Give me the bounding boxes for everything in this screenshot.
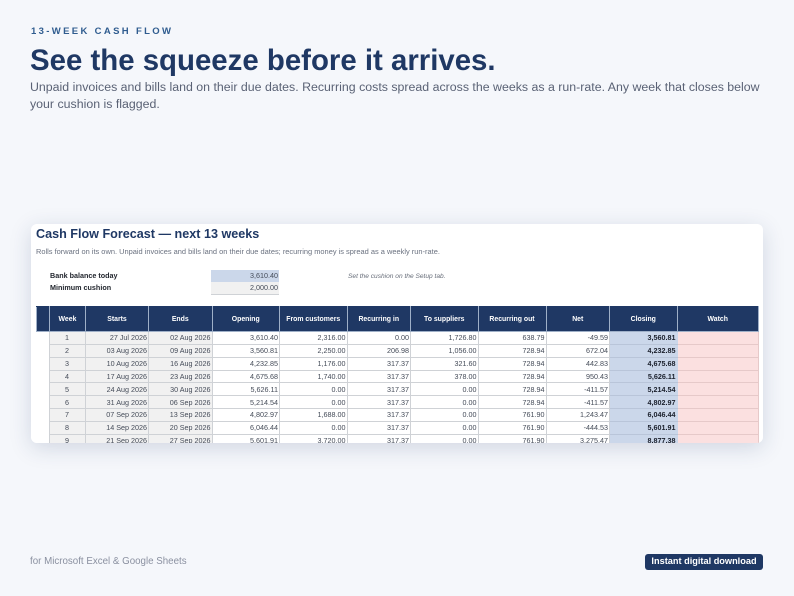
panel: forecast spreadsheet bbox=[31, 224, 763, 443]
forecast table: Recurring out bbox=[489, 316, 535, 322]
forecast table: -411.57 bbox=[584, 398, 608, 407]
forecast table: -444.53 bbox=[584, 423, 608, 432]
forecast table: 5,626.11 bbox=[648, 372, 676, 381]
title: See the squeeze before it arrives. bbox=[30, 44, 496, 77]
forecast table: 0.00 bbox=[462, 423, 476, 432]
forecast table: 321.60 bbox=[455, 359, 476, 368]
forecast table: 2 bbox=[65, 346, 69, 355]
forecast table: 07 Sep 2026 bbox=[106, 410, 147, 419]
forecast table: 317.37 bbox=[387, 410, 409, 419]
label: bank balance: Bank balance today bbox=[50, 271, 118, 280]
forecast table: Ends bbox=[172, 316, 189, 322]
forecast table: Week bbox=[59, 316, 76, 322]
forecast table: -49.59 bbox=[588, 333, 608, 342]
forecast table: 10 Aug 2026 bbox=[107, 359, 147, 368]
card shadow bbox=[31, 224, 763, 443]
sheet title: Cash Flow Forecast — next 13 weeks bbox=[36, 227, 259, 241]
forecast table: 1,056.00 bbox=[449, 346, 476, 355]
forecast table: 5 bbox=[65, 385, 69, 394]
forecast table: From customers bbox=[286, 316, 340, 322]
forecast table: 8 bbox=[65, 423, 69, 432]
forecast table: 7 bbox=[65, 410, 69, 419]
eyebrow label: 13-WEEK CASH FLOW bbox=[31, 26, 173, 37]
forecast table: 1,726.80 bbox=[449, 333, 476, 342]
forecast table: 0.00 bbox=[332, 385, 346, 394]
forecast table: 0.00 bbox=[395, 333, 409, 342]
forecast table: 16 Aug 2026 bbox=[170, 359, 210, 368]
forecast table: 3,560.81 bbox=[250, 346, 278, 355]
forecast table: Watch bbox=[708, 316, 728, 322]
forecast table: 4,675.68 bbox=[250, 372, 278, 381]
forecast table: 317.37 bbox=[387, 423, 409, 432]
forecast table: 4,232.85 bbox=[648, 346, 676, 355]
forecast table: 317.37 bbox=[387, 385, 409, 394]
forecast table: 14 Sep 2026 bbox=[106, 423, 147, 432]
forecast table: Recurring in bbox=[358, 316, 399, 322]
forecast table: 728.94 bbox=[523, 359, 544, 368]
description text: Unpaid invoices and bills land on their due dates. Recurring costs spread across the weeks as a run-rate. Any week that closes below your cushion is flagged. bbox=[30, 80, 760, 111]
forecast table: 0.00 bbox=[332, 423, 346, 432]
forecast table: 0.00 bbox=[462, 410, 476, 419]
forecast table: 4 bbox=[65, 372, 69, 381]
forecast table: 4,675.68 bbox=[648, 359, 676, 368]
forecast table: 3,560.81 bbox=[648, 333, 676, 342]
forecast table: 23 Aug 2026 bbox=[170, 372, 210, 381]
forecast table: 06 Sep 2026 bbox=[170, 398, 210, 407]
forecast table: 206.98 bbox=[387, 346, 409, 355]
setup note: Set the cushion on the Setup tab. bbox=[348, 273, 446, 280]
forecast table: 6,046.44 bbox=[648, 410, 676, 419]
footer note: for Microsoft Excel & Google Sheets bbox=[30, 556, 187, 567]
forecast table: 20 Sep 2026 bbox=[170, 423, 210, 432]
forecast table: 5,214.54 bbox=[250, 398, 278, 407]
forecast table: 30 Aug 2026 bbox=[170, 385, 210, 394]
forecast table: 02 Aug 2026 bbox=[170, 333, 210, 342]
forecast table: 672.04 bbox=[586, 346, 608, 355]
forecast table: 728.94 bbox=[523, 346, 544, 355]
forecast table: 950.43 bbox=[586, 372, 608, 381]
forecast table: 17 Aug 2026 bbox=[107, 372, 147, 381]
forecast table: 5,626.11 bbox=[251, 385, 278, 394]
forecast table: 4,232.85 bbox=[250, 359, 278, 368]
forecast table: 728.94 bbox=[523, 385, 544, 394]
forecast table: 24 Aug 2026 bbox=[107, 385, 147, 394]
forecast table: 09 Aug 2026 bbox=[170, 346, 210, 355]
forecast table: 5,601.91 bbox=[648, 423, 676, 432]
forecast table: 0.00 bbox=[462, 398, 476, 407]
forecast table: 1 bbox=[65, 333, 69, 342]
forecast table: 761.90 bbox=[523, 423, 544, 432]
badge: instant digital download bbox=[645, 554, 763, 570]
value: minimum cushion: 2,000.00 bbox=[250, 283, 278, 292]
forecast table: Closing bbox=[631, 316, 656, 322]
value: bank balance bbox=[211, 270, 279, 282]
forecast table: 3 bbox=[65, 359, 69, 368]
forecast table: 378.00 bbox=[455, 372, 476, 381]
forecast table: 5,214.54 bbox=[648, 385, 676, 394]
label: minimum cushion: Minimum cushion bbox=[50, 283, 111, 292]
forecast table: 728.94 bbox=[523, 372, 544, 381]
forecast table: 317.37 bbox=[387, 359, 409, 368]
forecast table: 0.00 bbox=[462, 385, 476, 394]
forecast table: 2,250.00 bbox=[318, 346, 346, 355]
forecast table: Opening bbox=[232, 316, 260, 322]
forecast table: 317.37 bbox=[387, 372, 409, 381]
forecast table: 638.79 bbox=[523, 333, 544, 342]
forecast table: 31 Aug 2026 bbox=[107, 398, 147, 407]
forecast table: -411.57 bbox=[584, 385, 608, 394]
forecast table: Starts bbox=[107, 316, 127, 322]
forecast table: 1,688.00 bbox=[318, 410, 346, 419]
forecast table: 1,740.00 bbox=[318, 372, 346, 381]
forecast table: 4,802.97 bbox=[648, 398, 676, 407]
forecast table: 317.37 bbox=[387, 398, 409, 407]
forecast table: To suppliers bbox=[424, 316, 464, 322]
forecast table: 27 Jul 2026 bbox=[110, 333, 147, 342]
forecast table: 03 Aug 2026 bbox=[107, 346, 147, 355]
forecast table: 4,802.97 bbox=[250, 410, 278, 419]
forecast table: 2,316.00 bbox=[318, 333, 346, 342]
value: bank balance: 3,610.40 bbox=[250, 271, 278, 280]
forecast table: 728.94 bbox=[523, 398, 544, 407]
badge: instant digital download: Instant digital download bbox=[651, 556, 757, 566]
forecast table: 761.90 bbox=[523, 410, 544, 419]
forecast table: Net bbox=[572, 316, 583, 322]
value: minimum cushion bbox=[211, 282, 279, 295]
forecast table: 13 Sep 2026 bbox=[170, 410, 210, 419]
forecast table: 0.00 bbox=[332, 398, 346, 407]
forecast table: 6,046.44 bbox=[250, 423, 278, 432]
forecast table bbox=[36, 306, 759, 443]
forecast table: 6 bbox=[65, 398, 69, 407]
sheet subtitle: Rolls forward on its own. Unpaid invoices and bills land on their due dates; recurring money is spread as a weekly run-rate. bbox=[36, 247, 440, 256]
forecast table: 1,243.47 bbox=[580, 410, 608, 419]
forecast table: 3,610.40 bbox=[250, 333, 278, 342]
forecast table: 442.83 bbox=[586, 359, 608, 368]
forecast table: 1,176.00 bbox=[318, 359, 346, 368]
